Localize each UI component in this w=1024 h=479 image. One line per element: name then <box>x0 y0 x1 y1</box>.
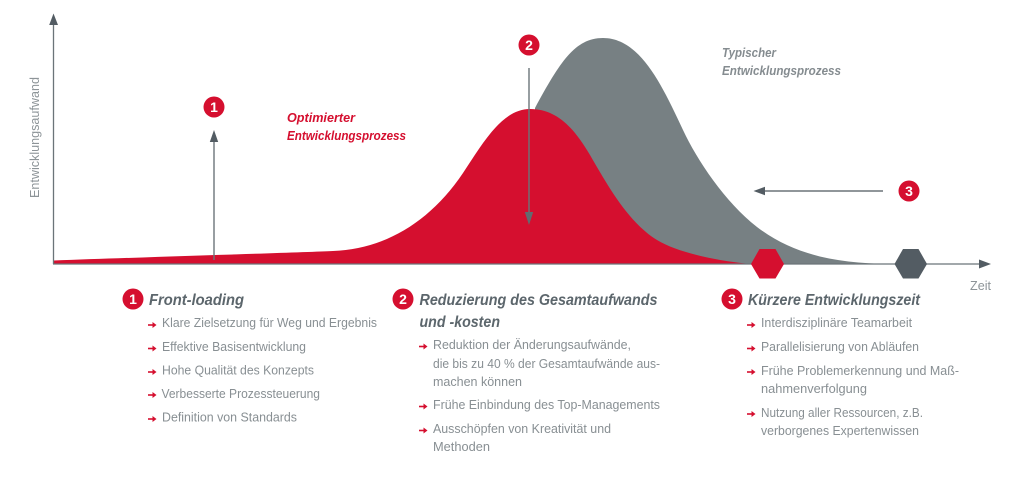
list: cost reduction items: Ausschöpfen von Kreativität und <box>433 422 611 436</box>
list: cost reduction items <box>419 338 660 454</box>
heading: cost reduction: Reduzierung des Gesamtaufwands <box>420 292 658 309</box>
heading: front-loading: Front-loading <box>149 292 244 309</box>
heading: cost reduction: und -kosten <box>420 314 500 331</box>
hexagon: optimised end <box>751 249 784 278</box>
label: typical process: Entwicklungsprozess <box>722 64 841 78</box>
number badge 2: 2 <box>399 291 407 307</box>
list: front-loading items: Klare Zielsetzung für Weg und Ergebnis <box>162 316 377 330</box>
list: cost reduction items: machen können <box>433 375 522 389</box>
heading: cost reduction <box>420 292 658 331</box>
heading: shorter development time: Kürzere Entwicklungszeit <box>748 292 921 309</box>
label: optimised process: Optimierter <box>287 111 356 125</box>
list: front-loading items: Hohe Qualität des Konzepts <box>162 364 314 378</box>
red curve: optimised development process <box>54 109 752 264</box>
marker 3 <box>898 180 920 202</box>
hexagon: typical end <box>894 249 927 278</box>
arrow 2: downward <box>525 68 533 225</box>
label: optimised process: Entwicklungsprozess <box>287 129 406 143</box>
label: typical process <box>722 46 841 78</box>
label: typical process: Typischer <box>722 46 777 60</box>
arrow 3: leftward <box>754 187 883 195</box>
list: cost reduction items: Methoden <box>433 440 490 454</box>
list: front-loading items: Effektive Basisentwicklung <box>162 340 306 354</box>
number badge 3: 3 <box>728 291 736 307</box>
panel: front-loading <box>122 288 377 424</box>
number badge 2 <box>392 288 414 310</box>
y axis label: Entwicklungsaufwand <box>28 77 42 198</box>
list: front-loading items <box>148 316 377 424</box>
number badge 1: 1 <box>129 291 137 307</box>
list: front-loading items: Definition von Standards <box>162 410 297 424</box>
arrow 1: upward <box>210 130 218 260</box>
list: shorter time items: Nutzung aller Ressourcen, z.B. <box>761 406 923 420</box>
grey curve: typical development process <box>535 38 895 264</box>
panel: cost reduction <box>392 288 660 454</box>
list: cost reduction items: Reduktion der Änderungsaufwände, <box>433 338 631 352</box>
list: shorter time items: nahmenverfolgung <box>761 382 867 396</box>
list: cost reduction items: Frühe Einbindung des Top-Managements <box>433 398 660 412</box>
number badge 3 <box>722 288 742 310</box>
label: optimised process <box>287 111 406 143</box>
list: cost reduction items: die bis zu 40 % der Gesamtaufwände aus- <box>433 357 660 371</box>
marker 1: 1 <box>210 99 218 115</box>
list: front-loading items: Verbesserte Prozessteuerung <box>162 387 320 401</box>
marker 2: 2 <box>525 37 533 53</box>
panel: shorter development time <box>722 288 959 438</box>
list: shorter time items: Interdisziplinäre Teamarbeit <box>761 316 913 330</box>
x axis label: Zeit <box>970 279 992 293</box>
marker 1 <box>204 96 224 118</box>
x axis arrow <box>53 260 991 268</box>
y axis arrow <box>49 14 58 264</box>
marker 2 <box>518 34 540 56</box>
list: shorter time items: Frühe Problemerkennung und Maß- <box>761 364 959 378</box>
list: shorter time items: Parallelisierung von Abläufen <box>761 340 919 354</box>
number badge 1 <box>122 288 144 310</box>
marker 3: 3 <box>905 183 913 199</box>
list: shorter time items <box>747 316 959 438</box>
list: shorter time items: verborgenes Expertenwissen <box>761 424 919 438</box>
